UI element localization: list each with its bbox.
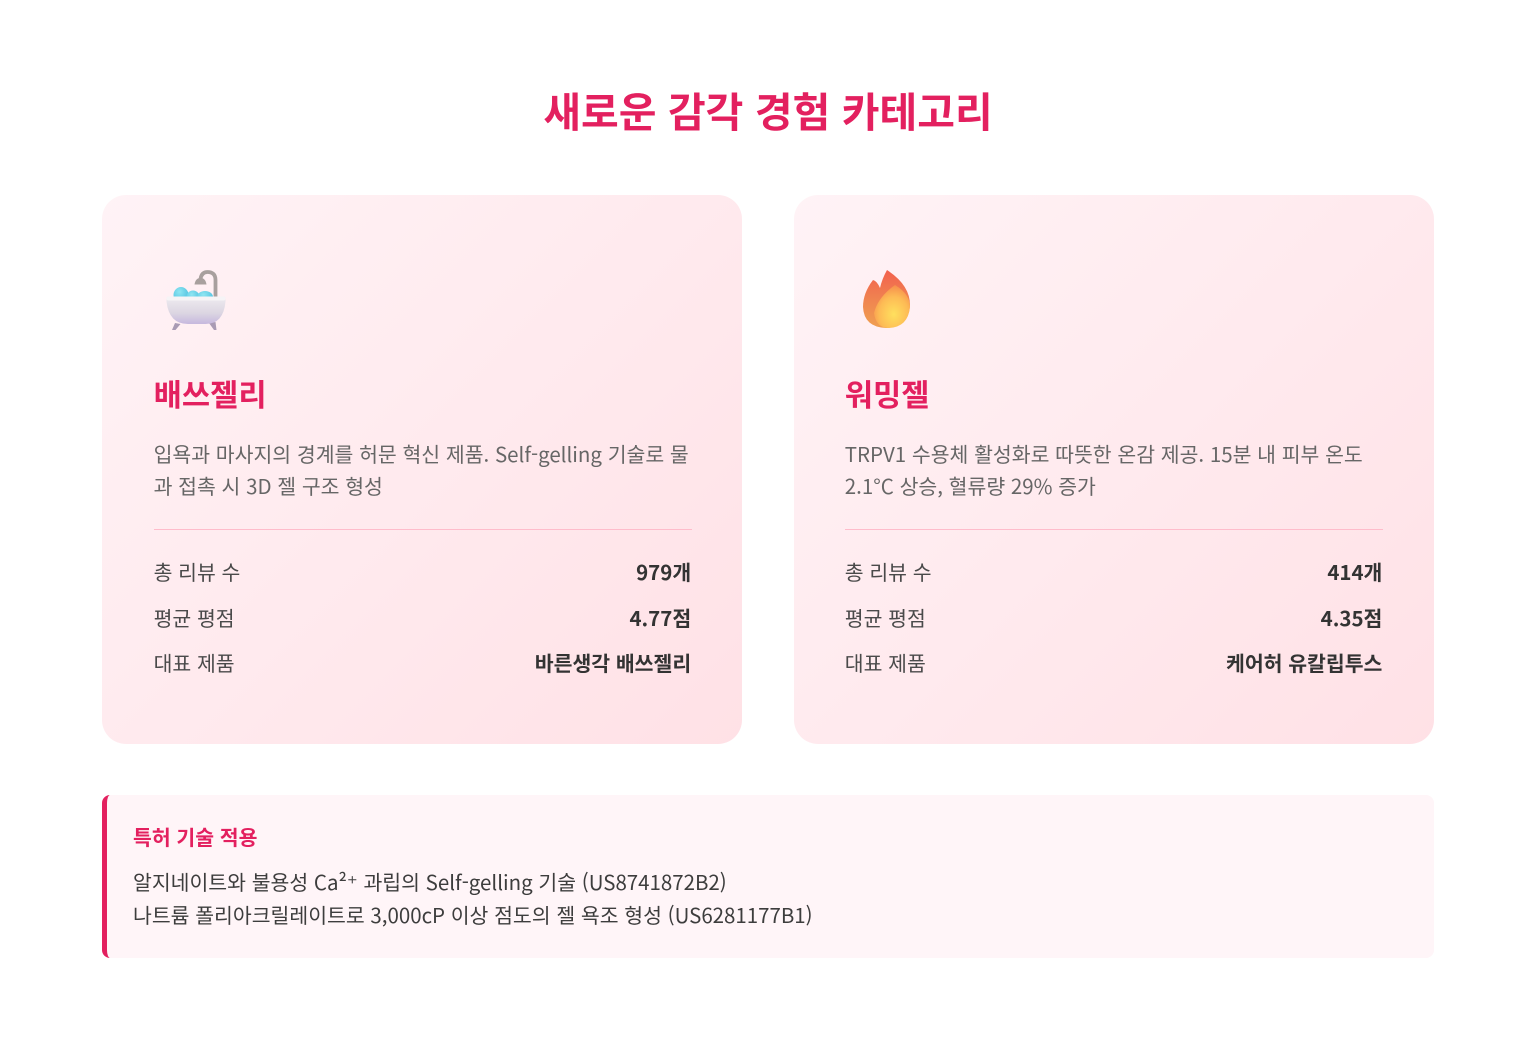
stat: product: 케어허 유칼립투스 [1226,647,1382,677]
stat: product: 바른생각 배쓰젤리 [535,647,691,677]
stat: rating: 평균 평점 [845,602,926,632]
callout heading: 특허 기술 적용 [133,821,257,851]
stat: reviews: 414개 [1327,556,1382,586]
title: 새로운 감각 경험 카테고리 [543,78,993,138]
description [154,438,689,500]
callout text [133,866,813,929]
panel: bath jelly [102,195,742,744]
callout text: 나트륨 폴리아크릴레이트로 3,000cP 이상 점도의 젤 욕조 형성 (US6281177B1) [133,899,813,929]
stat: rating: 평균 평점 [154,602,235,632]
stat: product: 대표 제품 [845,647,926,677]
description: 2.1°C 상승, 혈류량 29% 증가 [845,470,1096,500]
stat: reviews [154,556,691,586]
stat: product [154,647,691,677]
callout text: 알지네이트와 불용성 Ca²⁺ 과립의 Self-gelling 기술 (US8741872B2) [133,866,727,896]
description: 과 접촉 시 3D 젤 구조 형성 [154,470,383,500]
card heading: 워밍젤 [845,370,930,415]
stat: rating [154,602,691,632]
description: 입욕과 마사지의 경계를 허문 혁신 제품. Self-gelling 기술로 물 [154,438,689,468]
description [845,438,1363,500]
stat: product [845,647,1382,677]
description: TRPV1 수용체 활성화로 따뜻한 온감 제공. 15분 내 피부 온도 [845,438,1363,468]
stat: reviews: 총 리뷰 수 [845,556,932,586]
card heading: 배쓰젤리 [154,370,267,415]
stat: rating [845,602,1382,632]
panel: warming gel [794,195,1434,744]
stat: rating: 4.77점 [629,602,691,632]
stat: product: 대표 제품 [154,647,235,677]
stat: reviews: 979개 [636,556,691,586]
stat: reviews [845,556,1382,586]
panel: patent callout [102,795,1434,958]
icon: bathtub [166,270,226,330]
stat: rating: 4.35점 [1321,602,1382,632]
stat: reviews: 총 리뷰 수 [154,556,240,586]
icon: fire [863,270,910,328]
